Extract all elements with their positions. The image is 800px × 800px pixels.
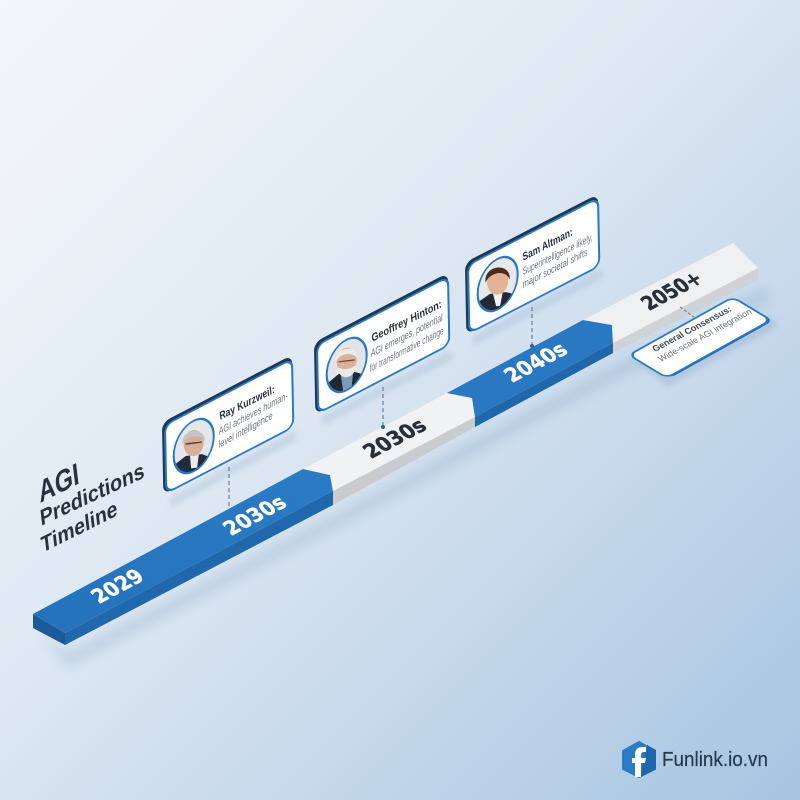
icon: portrait Altman xyxy=(476,256,519,312)
card: Sam Altman: Superintelligence likely, xyxy=(522,232,593,278)
year label: 2040s: 2040s xyxy=(499,339,573,387)
connector: Altman xyxy=(530,307,534,348)
connector: Hinton xyxy=(381,387,385,429)
title xyxy=(37,456,146,558)
card: Geoffrey Hinton: AGI emerges, potential xyxy=(369,312,444,360)
text: General Consensus: General Consensus: xyxy=(651,305,734,354)
connector: consensus xyxy=(680,307,694,317)
card: Sam Altman xyxy=(465,194,602,346)
card: Geoffrey Hinton: for transformative change xyxy=(369,325,444,375)
title: AGI xyxy=(37,456,81,510)
segment: 2050+ xyxy=(583,243,758,353)
segment: 2029 to 2030s xyxy=(33,469,333,645)
timeline bar xyxy=(33,243,758,645)
connector: Kurzweil xyxy=(228,467,230,507)
title: Predictions xyxy=(39,457,146,531)
year label: 2030s white: 2030s xyxy=(358,415,432,463)
text: Geoffrey Hinton: Geoffrey Hinton: xyxy=(371,298,442,345)
year label: 2030s blue: 2030s xyxy=(218,492,292,540)
year label: 2029: 2029 xyxy=(86,565,150,608)
icon: portrait Hinton xyxy=(326,336,368,394)
card: Ray Kurzweil: level intelligence xyxy=(218,410,273,451)
text: brand name: Funlink.io.vn xyxy=(662,749,768,771)
year label: 2050+: 2050+ xyxy=(636,267,708,315)
title: Timeline xyxy=(40,495,119,558)
icon: hexagon f xyxy=(623,742,656,778)
segment: 2040s xyxy=(447,320,613,427)
card: Geoffrey Hinton xyxy=(314,273,452,426)
card: Sam Altman: major societal shifts xyxy=(522,246,589,291)
segment: 2030s white xyxy=(303,393,475,505)
card: Ray Kurzweil: AGI achieves human- xyxy=(217,390,289,438)
logo: Funlink.io.vn xyxy=(623,742,768,778)
card: General Consensus xyxy=(629,297,778,386)
card: Ray Kurzweil xyxy=(162,355,296,508)
card: General Consensus: Wide-scale AGI integration xyxy=(657,307,754,364)
bar shadow xyxy=(40,288,770,668)
text: Sam Altman: Sam Altman: xyxy=(522,226,573,264)
text: Ray Kurzweil: Ray Kurzweil: xyxy=(219,383,275,423)
icon: portrait Kurzweil xyxy=(172,418,215,474)
